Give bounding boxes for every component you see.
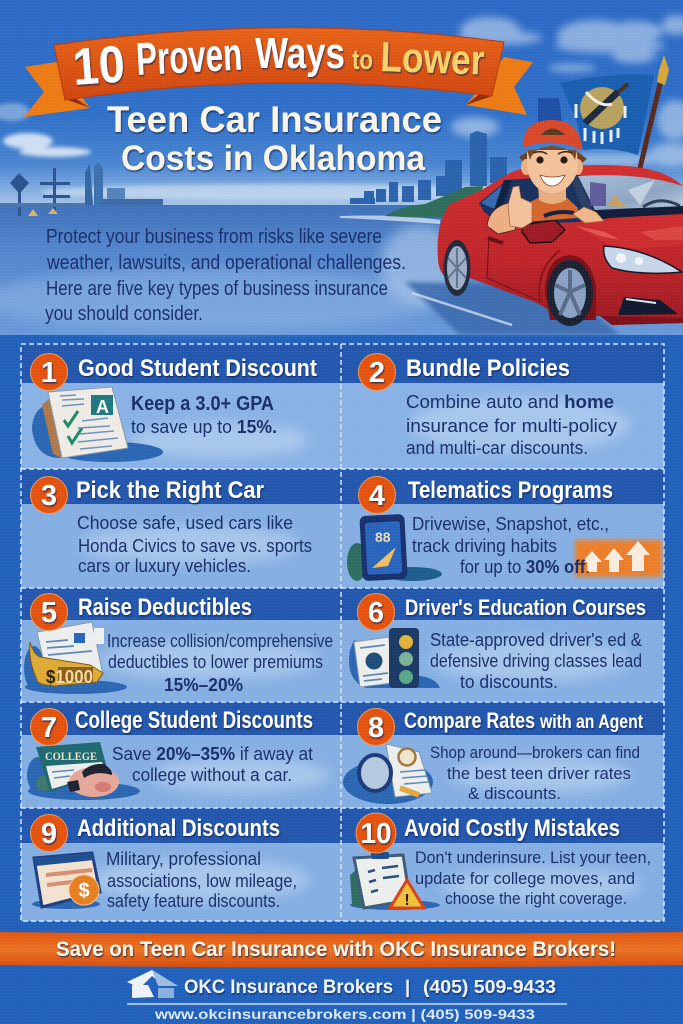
icon: magnifying glass over documents [343, 744, 433, 804]
heading 1: Good Student Discount [78, 355, 317, 382]
Oklahoma flag on pole [538, 55, 669, 168]
icon: clipboard with warning triangle: ! [404, 892, 410, 909]
heading 8: Compare Rates [404, 708, 535, 733]
text 4: track driving habits [412, 536, 557, 556]
text 1 [131, 393, 277, 437]
intro paragraph: weather, lawsuits, and operational challenges. [46, 252, 406, 274]
number badge 3 [30, 476, 68, 514]
number badge 2 [358, 354, 396, 390]
text 8 [430, 743, 640, 803]
heading 2: Bundle Policies [406, 355, 570, 382]
heading 4: Telematics Programs [408, 477, 613, 504]
number badge 7 [30, 708, 68, 746]
number badge 3: 3 [41, 480, 57, 512]
text 5: deductibles to lower premiums [108, 652, 323, 672]
text 5: Increase collision/comprehensive [107, 631, 333, 651]
text 7: Save 20%–35% if away at [112, 744, 313, 764]
text 4: Drivewise, Snapshot, etc., [412, 514, 609, 534]
eyes and smile [533, 152, 572, 154]
number badge 9 [30, 814, 68, 852]
text 6 [430, 630, 642, 692]
heading 7: College Student Discounts [75, 707, 313, 734]
shirt [522, 196, 578, 222]
text 6: defensive driving classes lead [430, 651, 642, 671]
icon: calendar and coin: $ [78, 880, 90, 902]
text 1: Keep a 3.0+ GPA [131, 393, 274, 415]
steering wheel [544, 212, 574, 216]
text 10: update for college moves, and [415, 869, 635, 888]
headlight [604, 246, 682, 273]
text 3: Choose safe, used cars like [77, 513, 293, 533]
number badge 4: 4 [369, 480, 385, 512]
title line 1: 10 [71, 35, 127, 97]
tip 9: additional discounts [30, 814, 297, 911]
text 10: choose the right coverage. [445, 889, 627, 908]
clouds left [3, 133, 91, 157]
skyline left [0, 162, 163, 216]
face [527, 150, 578, 193]
arm [487, 203, 520, 234]
tip 1: good student discount [30, 354, 317, 462]
text 2: Combine auto and home [406, 392, 614, 412]
intro paragraph: you should consider. [45, 303, 203, 325]
text 6: to discounts. [460, 672, 558, 692]
wheels [444, 240, 470, 296]
text 9: associations, low mileage, [107, 871, 297, 891]
skyline right [350, 131, 507, 204]
website and phone line: www.okcinsurancebrokers.com | (405) 509-9433 [154, 1006, 535, 1022]
tip 6: driver's education courses [349, 594, 646, 692]
number badge 1 [30, 354, 68, 390]
text 9: safety feature discounts. [107, 891, 280, 911]
call-to-action banner [0, 932, 683, 968]
text 2: and multi-car discounts. [406, 438, 588, 458]
panel: tips grid [21, 344, 664, 921]
text 7 [112, 744, 313, 785]
title line 1: to [352, 44, 373, 75]
clouds top right [451, 15, 683, 167]
icon: report card: A [96, 397, 109, 417]
number badge 10: 10 [360, 818, 392, 850]
icon: college book and piggy bank [27, 742, 140, 800]
icon: orange arrows [575, 540, 662, 577]
hero scene: sky, clouds, skyline and road [0, 0, 683, 335]
intro paragraph [45, 226, 406, 325]
ears [521, 159, 531, 175]
text 3 [77, 513, 312, 576]
number badge 6 [358, 594, 394, 630]
title line 1: Ways [255, 29, 345, 78]
text 6: State-approved driver's ed & [430, 630, 642, 650]
icon: clipboard with warning triangle [350, 852, 440, 910]
number badge 10 [356, 813, 396, 853]
text 9: Military, professional [106, 849, 261, 869]
text 8: Shop around—brokers can find [430, 743, 640, 762]
tip 4: telematics programs [347, 476, 662, 581]
icon: college book and piggy bank: COLLEGE [45, 749, 97, 763]
text 7: college without a car. [132, 765, 292, 785]
number badge 9: 9 [41, 818, 57, 850]
number badge 4 [358, 476, 396, 514]
text 9 [106, 849, 297, 911]
call-to-action banner: Save on Teen Car Insurance with OKC Insurance Brokers! [56, 938, 616, 961]
icon: policy with 1000 dollar wallet [24, 622, 127, 694]
number badge 8 [358, 708, 394, 746]
text 4: for up to 30% off. [460, 557, 590, 577]
number badge 7: 7 [41, 712, 57, 744]
hand on wheel [573, 207, 604, 223]
icon: phone with bush [347, 514, 442, 581]
title ribbon [24, 28, 533, 117]
intro paragraph: Here are five key types of business insurance [46, 278, 388, 300]
text 5 [107, 631, 333, 695]
intro paragraph: Protect your business from risks like severe [46, 226, 382, 248]
icon: policy with 1000 dollar wallet: $1000 [46, 667, 93, 687]
text 3: Honda Civics to save vs. sports [78, 536, 312, 556]
side mirror [522, 220, 565, 243]
red car [430, 0, 683, 326]
title line 3: Costs in Oklahoma [121, 139, 425, 178]
heading 9: Additional Discounts [77, 815, 280, 842]
number badge 2: 2 [369, 357, 385, 389]
company name and phone: | [405, 977, 410, 997]
icon: report card [32, 387, 163, 462]
text 2 [406, 392, 617, 458]
company name and phone [184, 977, 556, 998]
heading 8 [404, 708, 644, 733]
text 10 [415, 848, 651, 908]
tip 5: raise deductibles [24, 594, 333, 695]
heading 5: Raise Deductibles [78, 594, 252, 621]
trees [385, 186, 483, 218]
row bands [21, 344, 664, 921]
title line 1: Lower [380, 33, 485, 84]
text 8: the best teen driver rates [447, 764, 631, 783]
text 3: cars or luxury vehicles. [78, 556, 251, 576]
windows [479, 175, 600, 225]
title line 1 [71, 28, 485, 97]
number badge 6: 6 [368, 597, 384, 629]
teen driver with cap giving thumbs up [487, 120, 604, 234]
icon: phone with bush: 88 [375, 529, 391, 545]
hair [519, 150, 587, 166]
tip 3: pick the right car [30, 476, 312, 576]
tip 10: avoid costly mistakes [350, 813, 651, 910]
tip 7: college student discounts [27, 707, 313, 800]
title line 2: Teen Car Insurance [107, 99, 442, 140]
thumb [508, 186, 532, 228]
text 1: to save up to 15%. [131, 417, 277, 437]
number badge 5: 5 [41, 597, 57, 629]
heading 10: Avoid Costly Mistakes [404, 815, 620, 842]
dash and hood [572, 206, 683, 222]
logo icon: house shape [127, 970, 178, 998]
icon: calendar and coin [32, 853, 100, 909]
icon: booklet and traffic light [349, 628, 440, 688]
text 5: 15%–20% [164, 675, 243, 695]
tip 2: bundle policies [358, 354, 617, 458]
front grille [618, 297, 678, 315]
cap [523, 120, 582, 150]
text 4 [412, 514, 609, 577]
text 8: & discounts. [468, 784, 561, 803]
number badge 5 [30, 594, 68, 630]
title line 1: Proven [135, 28, 243, 85]
number badge 8: 8 [368, 712, 384, 744]
company name and phone: OKC Insurance Brokers [184, 977, 393, 998]
heading 3: Pick the Right Car [76, 477, 264, 504]
text 10: Don't underinsure. List your teen, [415, 848, 651, 867]
company name and phone: (405) 509-9433 [423, 977, 556, 997]
heading 8: with an Agent [539, 712, 644, 733]
door details [487, 238, 537, 300]
number badge 1: 1 [41, 357, 57, 389]
tip 8: compare rates with an agent [343, 708, 644, 804]
text 2: insurance for multi-policy [406, 416, 617, 436]
neck [538, 185, 566, 204]
